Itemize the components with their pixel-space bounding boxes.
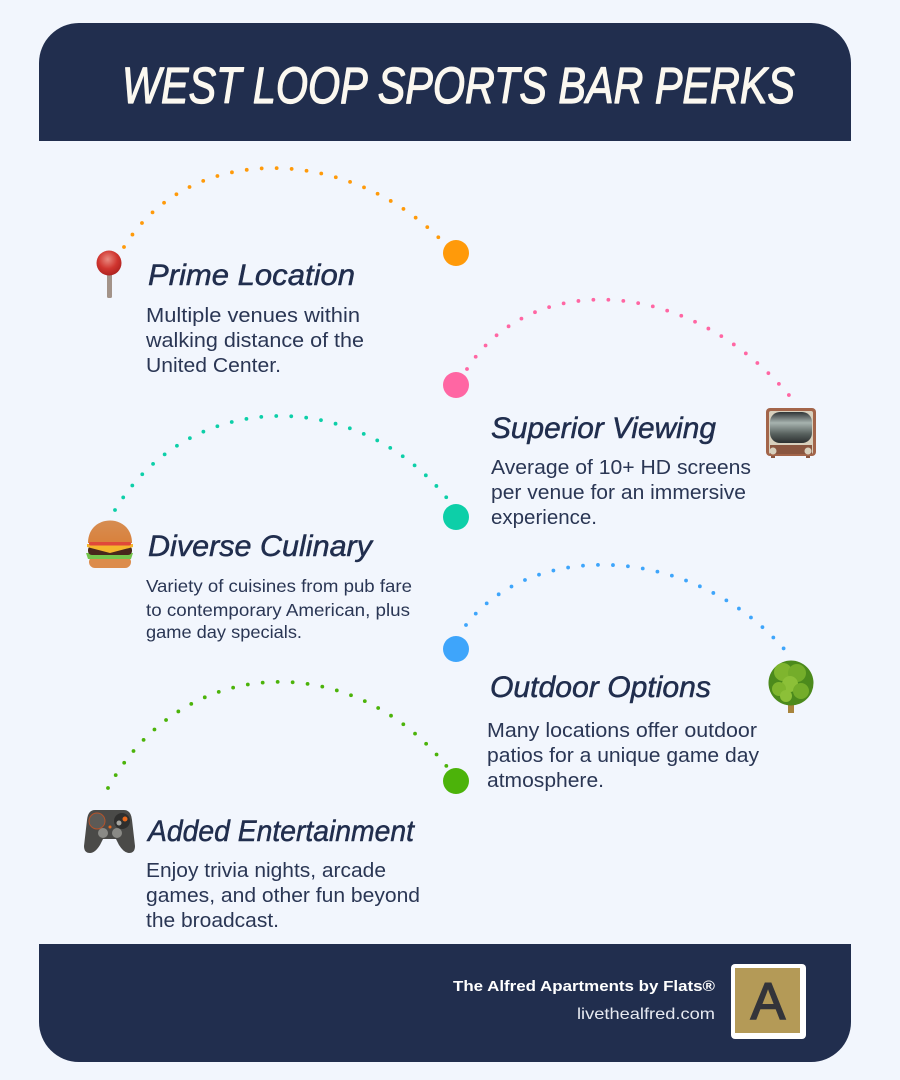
heading: Superior Viewing xyxy=(491,412,716,445)
panel: prime location xyxy=(96,168,469,377)
logo xyxy=(731,964,806,1039)
description: patios for a unique game day xyxy=(487,745,759,767)
description: to contemporary American, plus xyxy=(146,600,410,620)
description: experience. xyxy=(491,507,597,529)
description: the broadcast. xyxy=(146,910,279,932)
dotted arc: pink xyxy=(467,300,793,400)
description: games, and other fun beyond xyxy=(146,885,420,907)
dotted arc: teal xyxy=(115,416,450,510)
heading: Added Entertainment xyxy=(146,815,416,848)
node: orange xyxy=(443,240,469,266)
node: teal xyxy=(443,504,469,530)
icon: tree xyxy=(768,660,814,713)
node: pink xyxy=(443,372,469,398)
node: blue xyxy=(443,636,469,662)
footer website: livethealfred.com xyxy=(577,1006,715,1023)
description: Many locations offer outdoor xyxy=(487,720,757,742)
description: per venue for an immersive xyxy=(491,482,746,504)
description: Variety of cuisines from pub fare xyxy=(146,576,412,596)
footer banner xyxy=(39,944,851,1062)
icon: burger xyxy=(86,520,133,568)
node: green xyxy=(443,768,469,794)
description: Average of 10+ HD screens xyxy=(491,457,751,479)
description: United Center. xyxy=(146,355,281,377)
panel: added entertainment xyxy=(84,682,469,932)
header banner xyxy=(39,23,851,141)
description: game day specials. xyxy=(146,622,302,642)
dotted arc: green xyxy=(108,682,448,788)
heading: Diverse Culinary xyxy=(148,530,374,563)
icon: round pushpin xyxy=(96,250,122,298)
panel: diverse culinary xyxy=(86,416,469,642)
description: Multiple venues within xyxy=(146,305,360,327)
dotted arc: blue xyxy=(466,565,785,650)
description: Enjoy trivia nights, arcade xyxy=(146,860,386,882)
panel: outdoor options xyxy=(443,565,814,792)
description: walking distance of the xyxy=(145,330,364,352)
heading: Outdoor Options xyxy=(490,671,711,704)
description: atmosphere. xyxy=(487,770,604,792)
icon: game controller xyxy=(84,810,135,853)
icon: television xyxy=(766,408,816,458)
panel: superior viewing xyxy=(443,300,816,529)
footer company name: The Alfred Apartments by Flats® xyxy=(453,978,715,995)
heading: Prime Location xyxy=(148,259,355,292)
dotted arc: orange xyxy=(124,168,444,247)
logo: A xyxy=(751,973,786,1031)
